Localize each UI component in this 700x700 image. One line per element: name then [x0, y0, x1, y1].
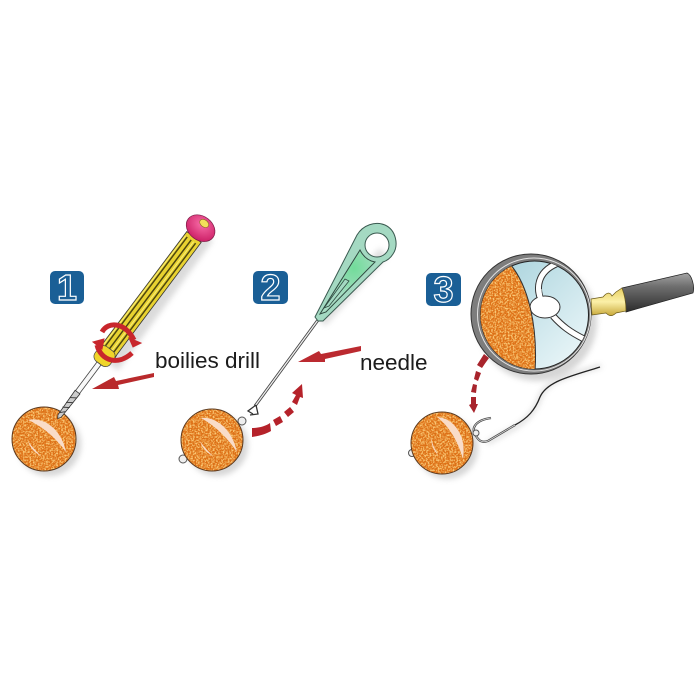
arrow: to needle [298, 346, 361, 362]
grip [91, 231, 202, 369]
boilie 3 [408, 409, 479, 479]
label: boilies drill: boilies drill [155, 348, 260, 373]
magnifier [470, 254, 694, 381]
bait in lens [480, 266, 536, 369]
rotation arrows [93, 325, 141, 360]
fishing line and hook [474, 366, 601, 443]
steel shaft [73, 362, 101, 397]
needle shaft [255, 320, 318, 406]
needle latch [248, 405, 258, 415]
dashed arrow: boilie to needle [252, 384, 303, 437]
label: needle: needle [360, 350, 428, 375]
rim [471, 254, 591, 374]
badge: step 3 [426, 269, 461, 310]
badge: step 1 [50, 267, 84, 308]
needle tool [248, 223, 396, 415]
pink cap [181, 209, 220, 247]
boilie 1 [10, 405, 81, 476]
brass collar [591, 288, 626, 316]
drill bit [55, 390, 80, 420]
drill tool [50, 209, 220, 425]
infographic: boilie rigging steps [12, 214, 694, 481]
needle body [315, 223, 396, 321]
badge: step 3: 3 [433, 269, 454, 310]
boilie 2 [178, 406, 248, 476]
dashed arrow: magnifier to hook [469, 354, 489, 413]
badge: step 1: 1 [57, 267, 77, 308]
badge: step 2 [253, 267, 288, 308]
handle [622, 273, 694, 312]
hair rig loop [553, 316, 584, 339]
badge: step 2: 2 [260, 267, 281, 308]
arrow: to drill [92, 373, 154, 389]
